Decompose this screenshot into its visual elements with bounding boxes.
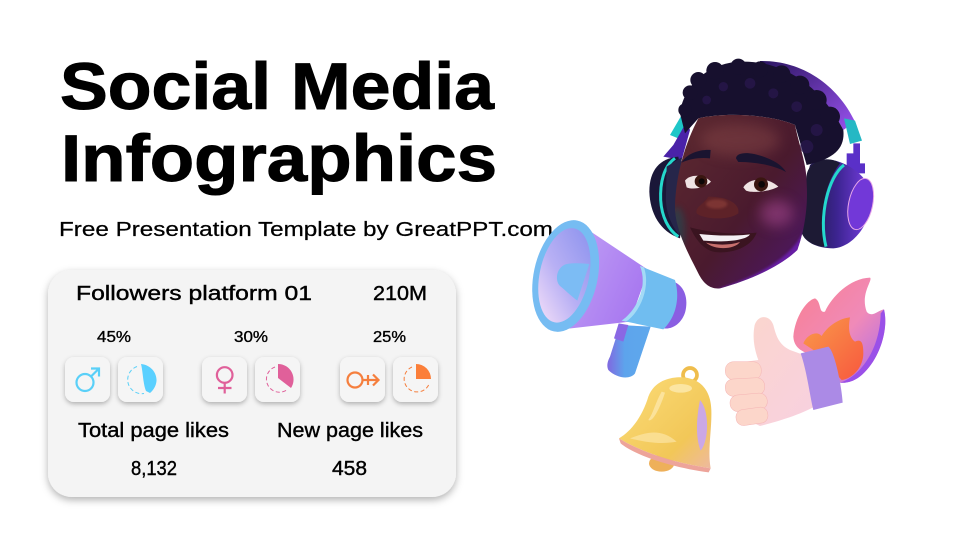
- rear cap: [663, 282, 686, 329]
- icon: female symbol: [202, 357, 247, 402]
- hand palm and thumb: [733, 317, 817, 426]
- title: [60, 49, 497, 195]
- icon: female 30% pie: [255, 357, 300, 402]
- followers total: 210M: [373, 283, 427, 305]
- icon: male 45% pie: [118, 357, 163, 402]
- handle: [607, 325, 651, 377]
- illustration: flame: [793, 278, 885, 383]
- value: new page likes: 458: [332, 458, 367, 480]
- percentage: other: 25%: [373, 329, 406, 346]
- bell rim: [523, 214, 609, 338]
- illustration: head with headphones: [649, 59, 878, 290]
- label: new page likes: New page likes: [277, 420, 423, 442]
- value: total page likes: 8,132: [131, 458, 177, 480]
- heading: followers platform: Followers platform 01: [76, 283, 312, 305]
- percentage: male: 45%: [97, 329, 131, 346]
- collar: [622, 266, 677, 329]
- inner flame: [803, 317, 863, 380]
- right headband slider: [844, 118, 862, 144]
- eyes: [685, 176, 711, 189]
- illustration: thumbs-up hand: [725, 317, 843, 426]
- right earcup: [801, 159, 878, 248]
- fingers: [725, 362, 769, 426]
- eyebrows: [682, 150, 711, 163]
- percentage: female: 30%: [234, 329, 268, 346]
- hair: [678, 59, 844, 165]
- wristband: [801, 347, 843, 410]
- face: [668, 115, 807, 290]
- icon: other 25% pie: [393, 357, 438, 402]
- horn body: [557, 230, 648, 330]
- title: Infographics: [61, 121, 497, 195]
- illustration: bell: [619, 368, 711, 472]
- illustration: megaphone: [523, 214, 686, 377]
- nose: [696, 197, 739, 218]
- speaker cone: [557, 263, 589, 301]
- panel: followers statistics: [48, 270, 456, 497]
- left earcup: [649, 157, 685, 238]
- subtitle: Free Presentation Template by GreatPPT.com: [59, 219, 553, 241]
- icon: male symbol: [65, 357, 110, 402]
- headband: [760, 61, 855, 130]
- label: total page likes: Total page likes: [78, 420, 229, 442]
- icon: other gender symbol: [340, 357, 385, 402]
- title: Social Media: [60, 49, 495, 123]
- mouth: [690, 227, 757, 252]
